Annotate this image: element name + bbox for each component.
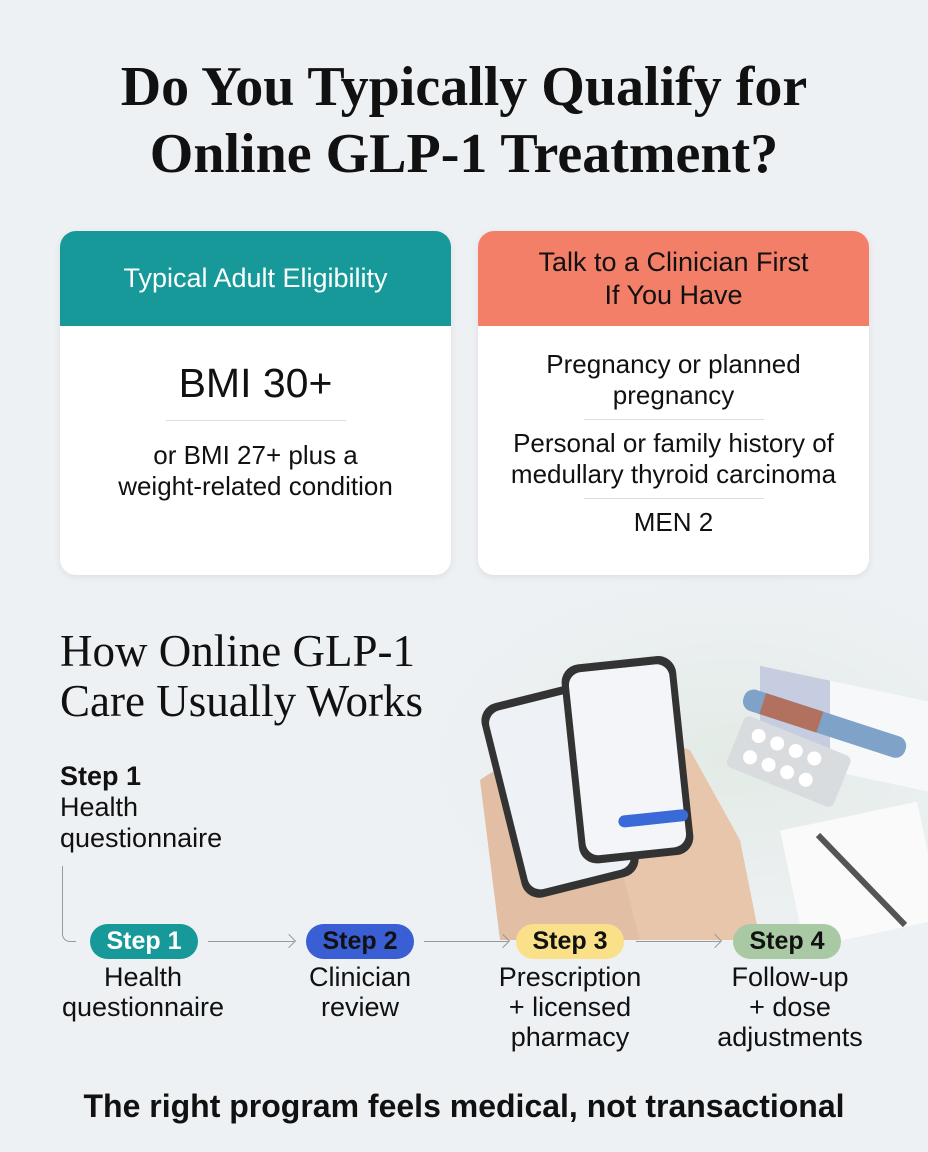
step 1 intro text [60,761,222,853]
text: BMI 27+: or BMI 27+ plus a [153,440,358,470]
text: + licensed [509,992,631,1022]
title: Online GLP-1 Treatment? [150,123,778,185]
text: Step 3 [532,927,608,955]
text: BMI 27+ [118,440,393,501]
text: pharmacy [511,1022,629,1052]
list of conditions: Personal or family history of [513,428,834,458]
text: Prescription [499,962,641,992]
text: adjustments [717,1022,863,1052]
text: BMI 27+: weight-related condition [118,471,393,501]
heading: talk to a clinician first: If You Have [604,280,743,310]
step 1 intro text: questionnaire [60,823,222,853]
text: Follow-up [731,962,849,992]
text: Clinician [309,962,411,992]
step pills and arrows [90,924,198,959]
step labels: questionnaire [62,992,224,1022]
list of conditions [511,349,836,537]
heading: talk to a clinician first [478,231,869,326]
text: BMI 30+: BMI 30+ [179,360,332,406]
step labels [62,962,224,1022]
connector [62,866,76,942]
title: Do You Typically Qualify for [121,56,807,118]
heading: typical adult eligibility: Typical Adult Eligibility [123,263,388,293]
title [121,56,807,185]
section heading: How Online GLP-1 [60,626,415,676]
illustration: phones, pen, pills [480,656,928,940]
footer tagline: The right program feels medical, not transactional [83,1088,845,1124]
panel: talk to a clinician [478,231,869,575]
step 1 intro text: Step 1 [60,761,141,791]
text: Step 4 [749,927,825,955]
panel: typical eligibility [60,231,451,575]
step labels: Health [104,962,182,992]
section heading: Care Usually Works [60,676,423,726]
heading: typical adult eligibility [60,231,451,326]
photo backdrop [440,580,928,940]
list of conditions: Pregnancy or planned [546,349,801,379]
text: Step 2 [322,927,398,955]
text: review [321,992,399,1022]
list of conditions: medullary thyroid carcinoma [511,459,836,489]
section heading [60,626,423,726]
heading: talk to a clinician first: Talk to a Clinician First [538,246,809,276]
step 1 intro text: Health [60,792,138,822]
text: + dose [749,992,831,1022]
list of conditions: pregnancy [613,380,734,410]
step pills and arrows: Step 1 [106,927,182,955]
list of conditions: MEN 2 [634,507,713,537]
